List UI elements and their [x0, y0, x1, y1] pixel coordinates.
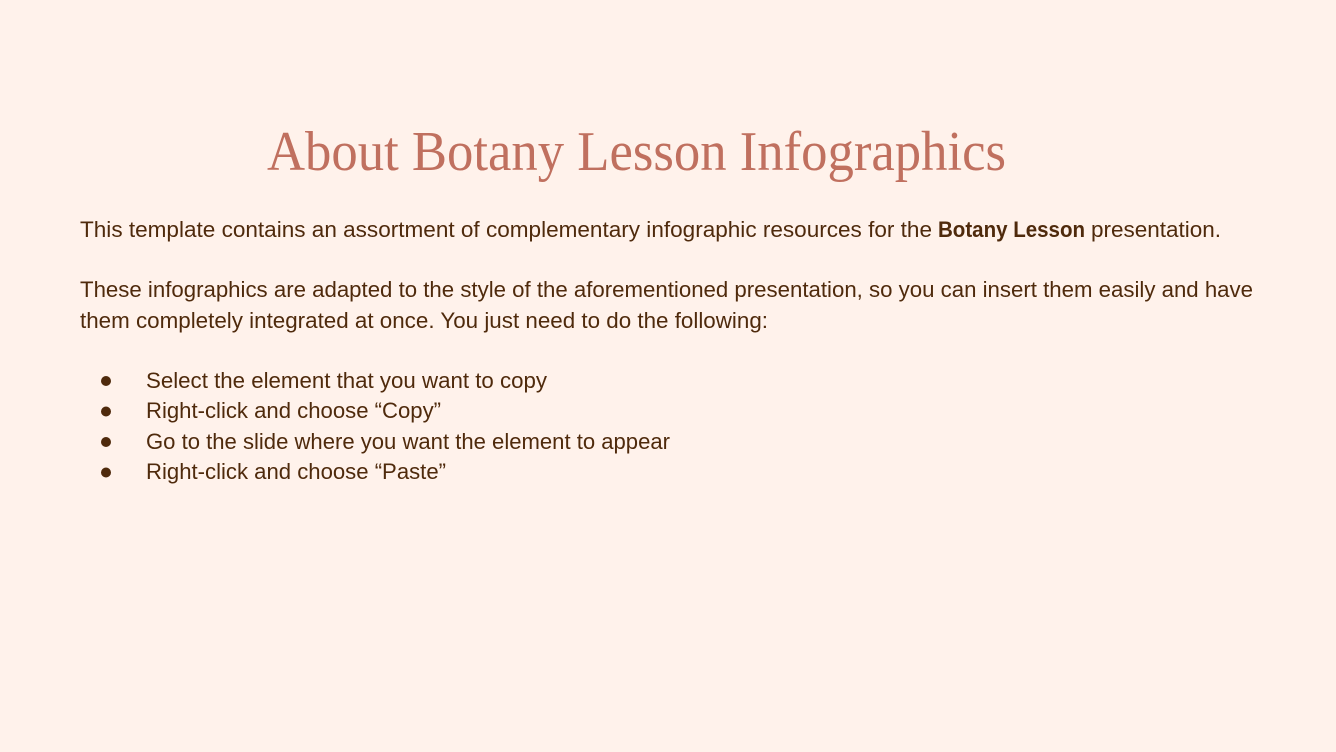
text block: usage paragraph: These infographics are adapted to the style of the aforementioned presentation, so you can insert them easily and have	[80, 277, 1253, 302]
text block: intro paragraph: Botany Lesson	[938, 217, 1085, 242]
text block: intro paragraph: This template contains an assortment of complementary infographic resources for the	[80, 217, 932, 242]
text block: usage paragraph: them completely integrated at once. You just need to do the following:	[80, 308, 768, 333]
bullet list: Right-click and choose “Copy”	[146, 398, 441, 423]
bullet list: Select the element that you want to copy	[146, 368, 547, 393]
text block: usage paragraph	[80, 277, 1253, 333]
bullet list: Go to the slide where you want the element to appear	[146, 429, 670, 454]
text block: intro paragraph: presentation.	[1091, 217, 1221, 242]
bullet list: Right-click and choose “Paste”	[146, 459, 446, 484]
bullet list	[101, 368, 670, 484]
title: About Botany Lesson Infographics	[267, 121, 1006, 183]
